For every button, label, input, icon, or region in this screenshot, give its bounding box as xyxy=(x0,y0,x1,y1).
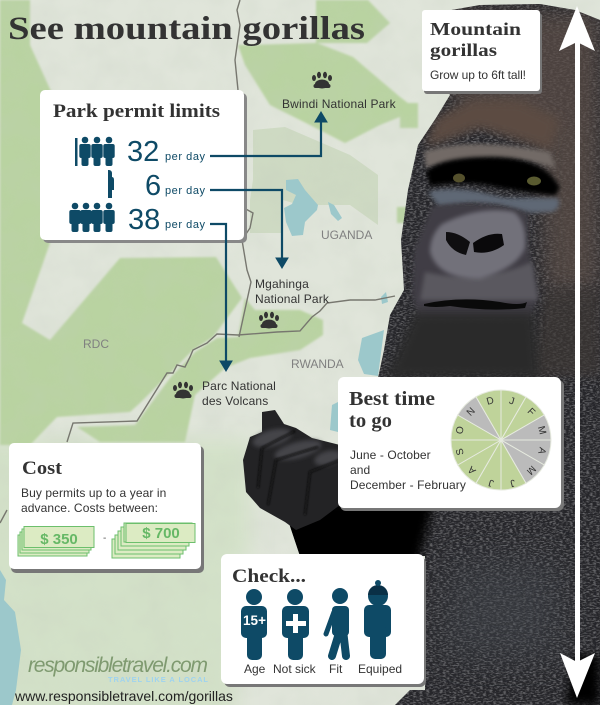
title: See mountain gorillas xyxy=(8,11,365,47)
panel: Cost: - xyxy=(103,533,106,544)
panel: Best time to go: and xyxy=(350,463,370,477)
region: lakes xyxy=(0,179,388,705)
panel: Cost xyxy=(9,443,204,573)
arrow: to Bwindi xyxy=(210,112,327,156)
month letters: J xyxy=(508,396,515,408)
row: 6 per day: 6 xyxy=(145,170,161,202)
panel: Mountain gorillas: gorillas xyxy=(430,40,497,60)
row: 6 per day: per day xyxy=(165,185,206,197)
row: 32 per day: per day xyxy=(165,151,206,163)
icon: Not sick xyxy=(282,589,309,660)
region: green forest areas xyxy=(0,0,418,445)
panel: Cost: Cost xyxy=(22,458,63,479)
month letters: O xyxy=(454,425,467,436)
icon: Fit xyxy=(326,588,349,656)
month letters: F xyxy=(525,406,537,418)
park name: Parc National des Volcans: des Volcans xyxy=(202,394,268,408)
park name: Bwindi: Bwindi National Park xyxy=(282,97,397,111)
panel: Check: Age xyxy=(244,662,266,676)
month letters: A xyxy=(535,446,548,456)
panel: Mountain gorillas: Grow up to 6ft tall! xyxy=(430,68,526,82)
row: 38 per day xyxy=(69,203,206,236)
hand xyxy=(243,410,340,530)
row: 32 per day: 32 xyxy=(127,136,159,168)
panel: Check: Check... xyxy=(232,566,306,587)
month letters: D xyxy=(485,395,495,408)
arrow: to Parc National des Volcans xyxy=(210,224,232,371)
icon: paw xyxy=(173,382,193,398)
panel: Best time to go: Best time xyxy=(349,388,435,410)
icon: paw xyxy=(259,312,279,328)
row: 32 per day xyxy=(75,136,206,168)
label: RDC: RDC xyxy=(83,337,109,351)
region: borders xyxy=(0,0,395,523)
panel: Best time to go: June - October xyxy=(350,448,431,462)
park name: Mgahinga: National Park xyxy=(255,292,330,306)
panel: Check: Fit xyxy=(329,662,343,676)
region: lower pale green wash xyxy=(0,440,250,705)
chin xyxy=(385,312,540,378)
panel: Park permit limits xyxy=(40,90,247,243)
panel: Mountain gorillas: Mountain xyxy=(430,19,521,39)
icon: $700 banknotes: $ 700 xyxy=(142,525,180,542)
icon: $350 banknotes xyxy=(18,526,94,556)
gorilla xyxy=(243,4,600,705)
park name: Parc National des Volcans: Parc National xyxy=(202,379,276,393)
panel: Check: Equiped xyxy=(358,662,402,676)
under eyes xyxy=(428,189,559,213)
panel: Mountain gorillas xyxy=(422,10,542,94)
gorilla body xyxy=(288,4,600,705)
brow ridge xyxy=(424,144,556,168)
panel: Cost: Buy permits up to a year in xyxy=(21,486,166,500)
logo: responsibletravel.com: responsibletravel.com xyxy=(28,654,208,677)
icon: $350 banknotes: $ 350 xyxy=(40,531,78,548)
park name: Mgahinga: Mgahinga xyxy=(255,277,309,291)
panel: Cost: advance. Costs between: xyxy=(21,501,158,515)
month letters: N xyxy=(465,406,478,419)
white height arrow xyxy=(559,6,595,698)
gorilla shading xyxy=(280,12,600,705)
panel: Best time to go: December - February xyxy=(350,478,466,492)
row: 38 per day: 38 xyxy=(128,204,160,236)
mouth xyxy=(424,299,527,310)
muzzle xyxy=(412,203,538,320)
nostrils xyxy=(446,232,470,255)
lower muzzle xyxy=(420,262,538,300)
eye left xyxy=(453,174,465,182)
panel: Check xyxy=(221,554,426,687)
brow xyxy=(426,157,560,196)
row: 6 per day xyxy=(108,170,206,202)
row: 38 per day: per day xyxy=(165,219,206,231)
region: faint reserves xyxy=(250,127,378,233)
heading: Park permit limits xyxy=(53,101,220,122)
month letters xyxy=(454,395,548,488)
chart: month wheel xyxy=(451,390,551,490)
park name: Mgahinga xyxy=(255,277,330,328)
panel: Best time to go: to go xyxy=(349,410,392,432)
nose xyxy=(430,210,525,279)
icon: paw xyxy=(312,72,332,88)
panel: Best time to go xyxy=(338,377,564,511)
eye right xyxy=(527,176,541,186)
month letters: M xyxy=(535,425,548,436)
month letters: J xyxy=(509,476,516,488)
icon: $700 banknotes xyxy=(112,523,195,558)
icon: Equiped xyxy=(364,580,391,659)
arrow: to Mgahinga xyxy=(210,190,288,268)
logo: responsibletravel.com: TRAVEL LIKE A LOCAL xyxy=(108,675,208,684)
website url: www.responsibletravel.com/gorillas xyxy=(14,688,233,704)
panel: Check: Not sick xyxy=(273,662,317,676)
month letters: A xyxy=(466,463,478,476)
park name: Parc National des Volcans xyxy=(173,379,276,408)
icon: Age xyxy=(241,589,267,660)
month letters: S xyxy=(454,447,467,456)
icon: Age: 15+ xyxy=(243,613,266,628)
park name: Bwindi xyxy=(282,72,397,111)
label: UGANDA: UGANDA xyxy=(321,228,372,242)
month letters: J xyxy=(488,476,495,488)
label: RWANDA: RWANDA xyxy=(291,357,344,371)
month letters: M xyxy=(524,463,538,477)
